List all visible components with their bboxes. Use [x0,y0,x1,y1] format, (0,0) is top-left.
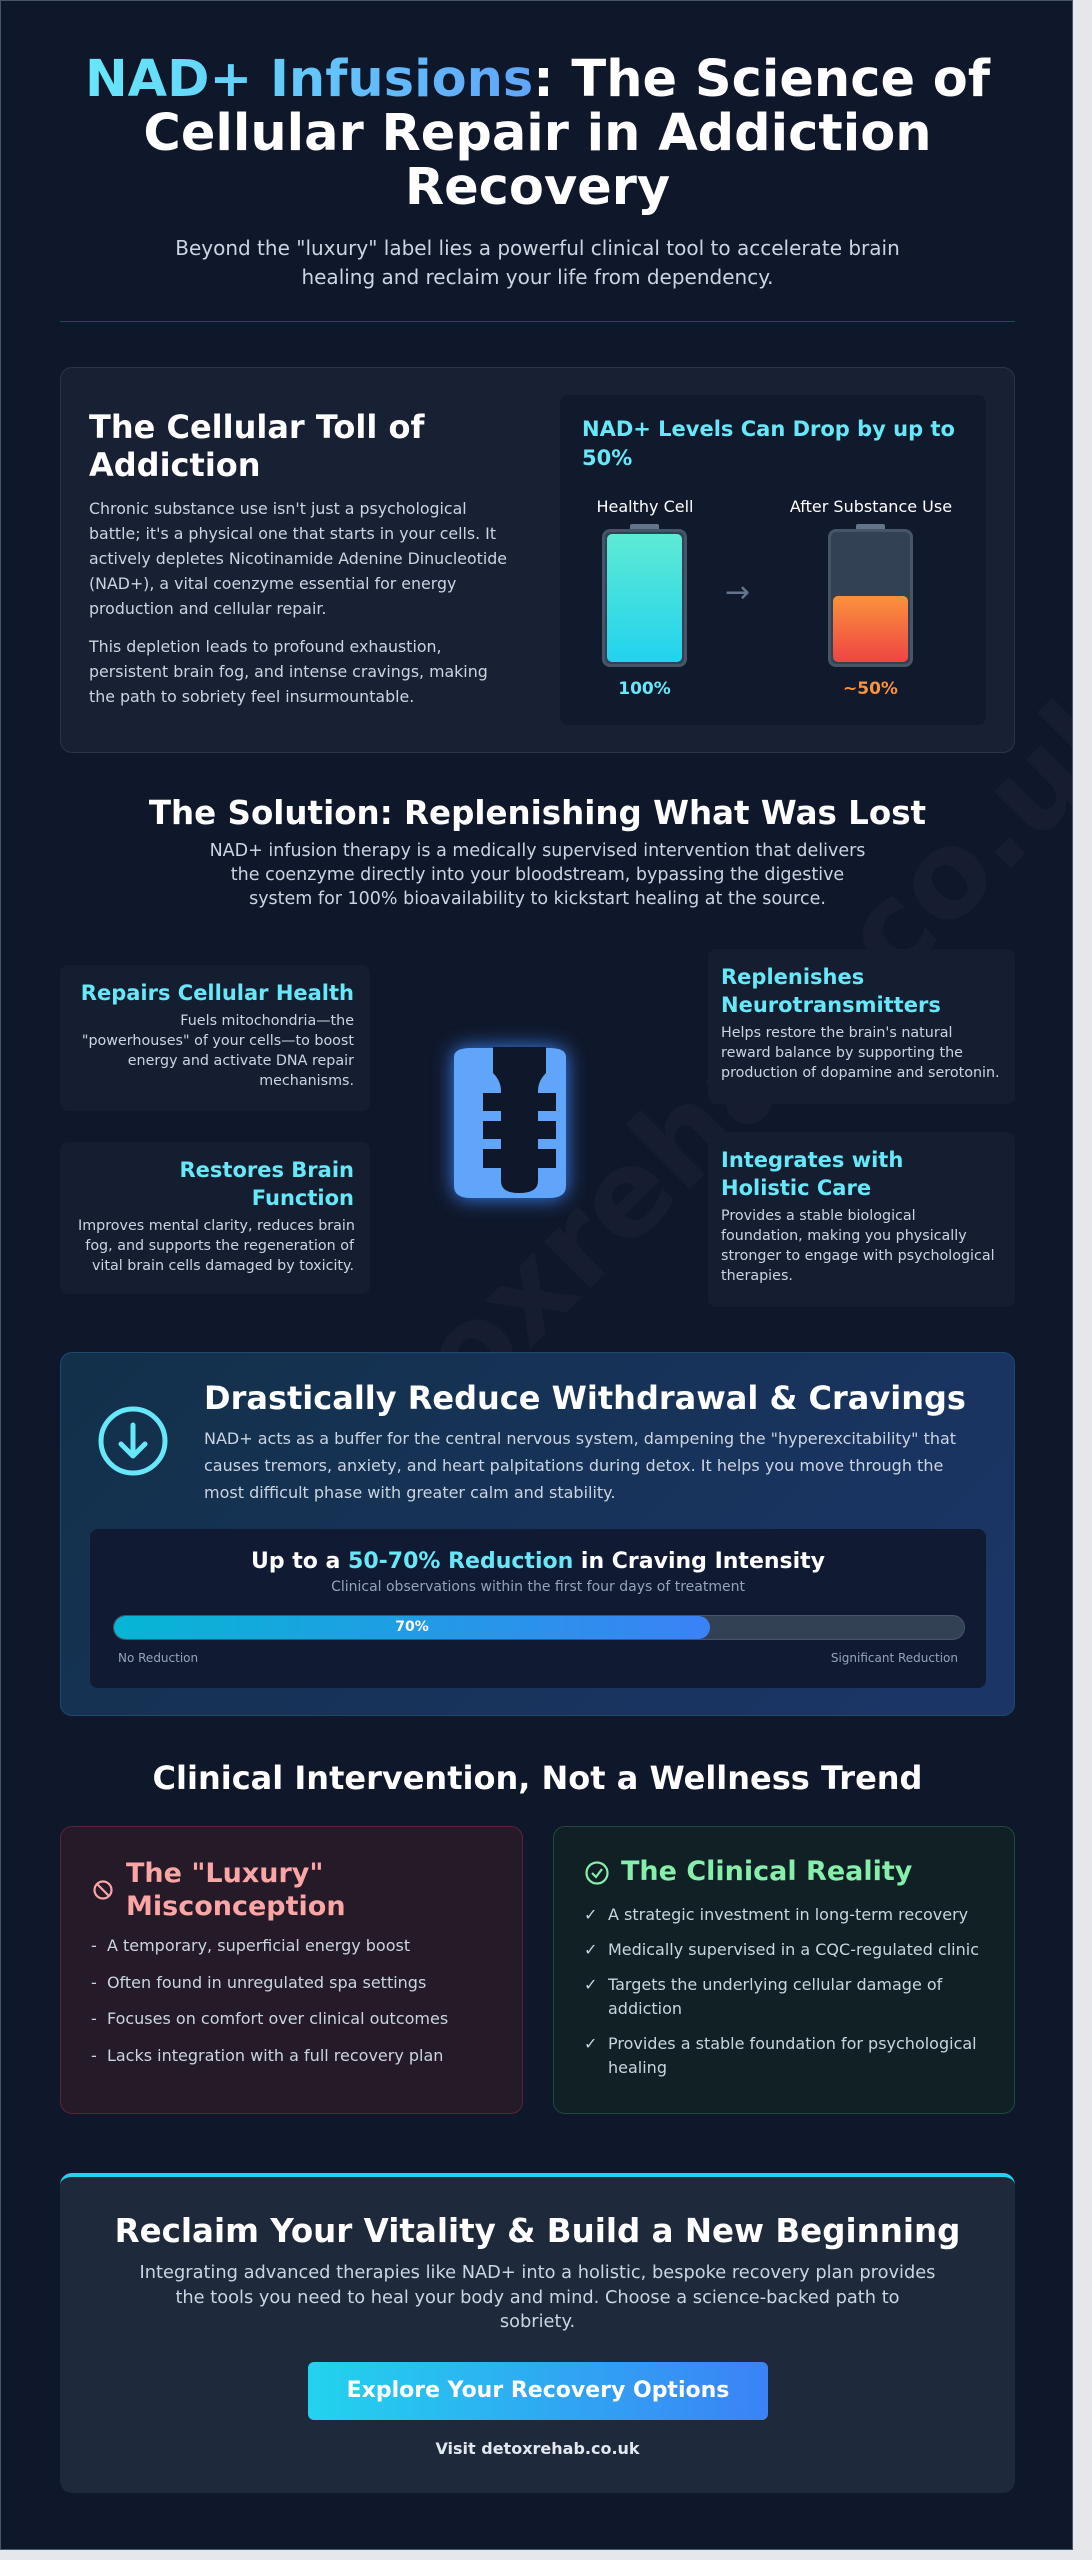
subtitle: Beyond the "luxury" label lies a powerful clinical tool to accelerate brain [175,236,900,260]
text: website: Visit detoxrehab.co.uk [435,2439,640,2458]
text: cellular toll: (NAD+), a vital coenzyme essential for energy [89,574,456,593]
panel: cellular toll [60,367,1015,753]
panel: luxury misconception: - Focuses on comfort over clinical outcomes [91,2009,448,2028]
icon: check circle [585,1861,609,1885]
panel: clinical reality: ✓ [584,1905,597,1924]
text: cellular toll: battle; it's a physical one that starts in your cells. It [89,524,496,543]
panel: restores brain function: fog, and supports the regeneration of [85,1238,354,1254]
chart: battery comparison: After Substance Use [790,497,952,516]
bar chart: craving reduction: Clinical observations within the first four days of treatment [331,1579,745,1595]
text: solution: system for 100% bioavailability to kickstart healing at the source. [249,889,826,909]
text: cellular toll [88,499,507,706]
panel: clinical reality [553,1826,1015,2114]
panel: clinical reality: Targets the underlying cellular damage of addiction [608,1975,942,2018]
panel: clinical reality: Provides a stable foundation for psychological healing [608,2034,977,2077]
panel: replenishes neurotransmitters: reward balance by supporting the [721,1045,963,1061]
panel: repairs cellular health: "powerhouses" of your cells—to boost [82,1033,354,1049]
panel: repairs cellular health: mechanisms. [259,1073,354,1089]
subtitle [175,236,900,289]
text: cta [140,2262,935,2332]
chart: battery comparison [560,395,986,725]
icon: infusion vial [438,1030,582,1214]
panel: repairs cellular health: energy and activate DNA repair [128,1053,354,1069]
text: cellular toll: Chronic substance use isn't just a psychological [89,499,467,518]
chart: battery comparison: 100% [618,679,671,699]
icon: prohibited [93,1880,113,1900]
panel: restores brain function [60,1142,370,1294]
panel: luxury misconception: - A temporary, superficial energy boost [91,1936,410,1955]
panel: restores brain function: vital brain cells damaged by toxicity. [92,1258,354,1274]
arrow: → [725,575,750,610]
chart: battery comparison: NAD+ Levels Can Drop by up to 50% [582,417,955,470]
bar chart: craving reduction: No Reduction [118,1651,198,1665]
panel: clinical reality: ✓ [584,1940,597,1959]
panel: clinical reality: ✓ [584,2034,597,2053]
panel: restores brain function: Function [252,1186,354,1210]
text: cta: sobriety. [500,2311,575,2332]
text: solution: NAD+ infusion therapy is a medically supervised intervention that delivers [210,841,865,861]
heading: withdrawal: Drastically Reduce Withdrawal & Cravings [204,1379,966,1417]
panel: repairs cellular health: Fuels mitochondria—the [180,1013,354,1029]
panel: repairs cellular health: Repairs Cellular Health [81,981,354,1005]
bar chart: craving reduction [90,1529,986,1688]
panel: call to action [60,2173,1015,2493]
panel: luxury misconception: - Often found in unregulated spa settings [91,1972,426,1992]
panel: restores brain function: Restores Brain [180,1158,354,1182]
panel: clinical reality: Medically supervised in a CQC-regulated clinic [608,1940,979,1959]
panel: replenishes neurotransmitters: production of dopamine and serotonin. [721,1065,1000,1081]
heading: clinical intervention: Clinical Intervention, Not a Wellness Trend [153,1759,922,1797]
bar chart: craving reduction: Significant Reduction [831,1651,958,1665]
panel: integrates with holistic care: Provides a stable biological [721,1208,916,1224]
heading: clinical reality: The Clinical Reality [621,1856,912,1887]
heading: cta: Reclaim Your Vitality & Build a New Beginning [115,2212,960,2250]
heading: misconception: The "Luxury" Misconception [126,1858,346,1922]
bar chart: craving reduction: Up to a 50-70% Reduction in Craving Intensity [251,1549,825,1574]
button: explore options [308,2362,768,2420]
panel: restores brain function: Improves mental clarity, reduces brain [78,1218,355,1234]
heading: solution: The Solution: Replenishing What Was Lost [149,794,926,832]
bar chart: craving reduction: 70% [395,1619,429,1635]
panel: clinical reality: A strategic investment in long-term recovery [608,1905,968,1924]
icon: healthy battery [602,524,687,667]
chart: battery comparison: Healthy Cell [596,497,694,516]
panel: replenishes neurotransmitters: Replenishes [721,965,864,989]
text: cellular toll: This depletion leads to profound exhaustion, [89,637,442,656]
text: cellular toll: persistent brain fog, and intense cravings, making [89,662,488,681]
heading: cellular toll: The Cellular Toll of Addiction [89,408,424,484]
chart: battery comparison: ~50% [843,679,898,699]
text: cellular toll: actively depletes Nicotinamide Adenine Dinucleotide [89,549,507,568]
panel: integrates with holistic care: therapies. [721,1268,793,1284]
text: cta: the tools you need to heal your body and mind. Choose a science-backed path to [175,2286,900,2308]
button: explore options: Explore Your Recovery Options [347,2378,729,2403]
text: cellular toll: the path to sobriety feel insurmountable. [89,687,414,706]
panel: integrates with holistic care: foundation, making you physically [721,1228,967,1244]
text: cta: Integrating advanced therapies like NAD+ into a holistic, bespoke recovery plan provides [140,2262,935,2283]
panel: integrates with holistic care: stronger to engage with psychological [721,1248,995,1264]
panel: replenishes neurotransmitters [708,949,1015,1104]
panel: luxury misconception [60,1826,523,2114]
panel: replenishes neurotransmitters: Neurotransmitters [721,993,941,1017]
panel: clinical reality: ✓ [584,1975,597,1994]
panel: repairs cellular health [60,965,370,1111]
text: cellular toll: production and cellular repair. [89,599,326,618]
panel: replenishes neurotransmitters: Helps restore the brain's natural [721,1025,952,1041]
icon: depleted battery [828,524,913,667]
text: solution [210,841,865,909]
panel: integrates with holistic care [708,1132,1015,1307]
text: solution: the coenzyme directly into your bloodstream, bypassing the digestive [231,865,844,885]
panel: integrates with holistic care: Holistic Care [721,1176,871,1200]
panel: integrates with holistic care: Integrates with [721,1148,903,1172]
panel: withdrawal & cravings [60,1352,1015,1716]
title: NAD+ Infusions: The Science of Cellular Repair in Addiction Recovery [85,50,990,217]
subtitle: healing and reclaim your life from dependency. [301,265,774,289]
icon: down arrow circle [98,1406,168,1476]
panel: luxury misconception: - Lacks integration with a full recovery plan [91,2046,443,2064]
text: withdrawal: NAD+ acts as a buffer for the central nervous system, dampening the "hyperexcitability" that causes tremors, anxiety, and heart palpitations during detox. It helps you move through the most difficult phase with greater calm and stability. [204,1429,956,1502]
